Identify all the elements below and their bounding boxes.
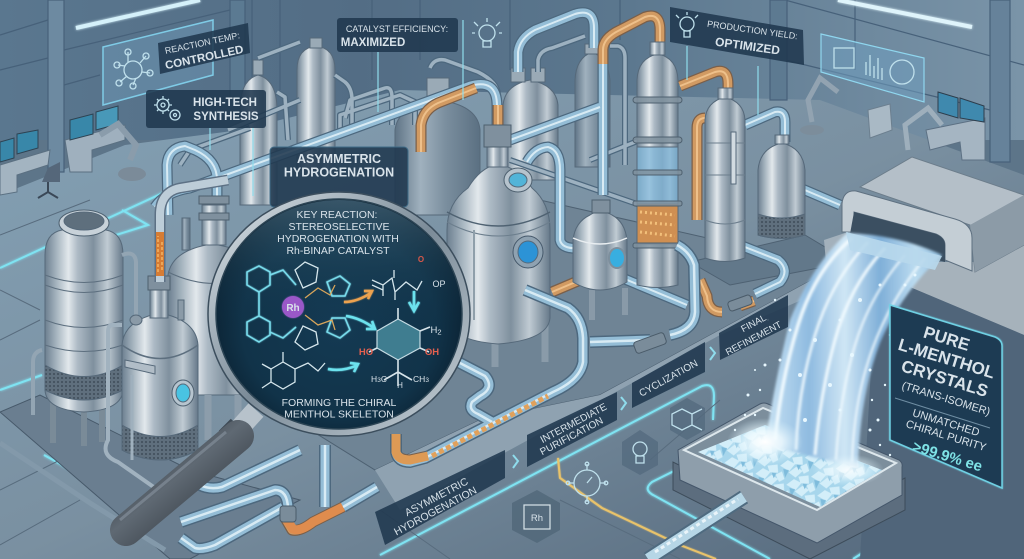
robot arm behind desk xyxy=(905,108,942,150)
lens text: key reaction: KEY REACTION: xyxy=(297,209,377,221)
label: production yield: OPTIMIZED xyxy=(714,35,781,58)
table front xyxy=(860,285,1024,559)
orange pipe top of front reactor xyxy=(158,180,228,282)
icon: bulb badge xyxy=(622,430,658,475)
arrow step 3 xyxy=(710,347,715,360)
menthol ring: H3C xyxy=(371,374,387,384)
cyan arrow down xyxy=(409,291,419,311)
process step: asymmetric hydrogenation xyxy=(375,450,505,545)
menthol ring: H xyxy=(430,325,437,336)
label: production yield xyxy=(670,7,804,65)
substrate molecule top right xyxy=(372,255,446,300)
callout line under high-tech xyxy=(210,128,253,196)
label: catalyst efficiency: CATALYST EFFICIENCY: xyxy=(346,24,448,34)
outlet pipe from tray xyxy=(648,497,744,559)
lens text: key reaction: HYDROGENATION WITH xyxy=(277,233,399,245)
menthol ring: HO xyxy=(359,347,373,358)
floor tile seams xyxy=(0,200,1024,559)
tray outer wall xyxy=(678,403,902,543)
menthol ring: H xyxy=(397,381,403,390)
column: tall reaction column xyxy=(633,42,682,288)
tray base plate xyxy=(673,462,905,559)
cyan arrow right xyxy=(346,316,375,329)
process step: cyclization xyxy=(632,342,705,408)
left consoles and chair xyxy=(0,106,146,198)
glass pipework xyxy=(155,13,840,305)
cyan arrow bottom xyxy=(328,363,358,372)
chute front frame xyxy=(842,191,972,271)
lens text: forming: MENTHOL SKELETON xyxy=(284,408,394,420)
label: catalyst efficiency: MAXIMIZED xyxy=(341,37,405,49)
orange process pipes xyxy=(285,16,754,530)
low glass pipes xyxy=(181,245,695,549)
splash glow xyxy=(727,418,803,466)
icon: chip xyxy=(834,48,854,68)
vessel: right tank xyxy=(758,135,805,238)
process step: final refinement: FINAL xyxy=(739,313,768,335)
substrate molecule top right: O xyxy=(418,255,424,264)
lens text: key reaction: STEREOSELECTIVE xyxy=(289,221,389,233)
process step: asymmetric hydrogenation: ASYMMETRIC xyxy=(403,475,471,519)
icon: gears xyxy=(154,96,180,120)
vessel: main reactor xyxy=(447,125,550,367)
chute top box xyxy=(860,157,1024,272)
icon: idea bulb xyxy=(472,18,502,47)
chute housing xyxy=(824,157,1024,272)
catalyst molecule xyxy=(247,262,350,350)
callout lines under production label xyxy=(687,46,758,115)
label: high-tech synthesis: SYNTHESIS xyxy=(193,111,259,123)
vessel: large storage tank xyxy=(33,210,136,446)
vessel: small side reactor xyxy=(573,200,627,320)
menthol ring: 2 xyxy=(437,328,442,336)
lens text: key reaction: Rh-BINAP CATALYST xyxy=(286,245,390,257)
process step: final refinement: REFINEMENT xyxy=(724,319,784,358)
chute opening xyxy=(850,212,945,262)
hologram screen right xyxy=(821,34,924,102)
label: high-tech synthesis: HIGH-TECH xyxy=(193,97,257,109)
tray inner wall xyxy=(684,408,896,510)
process step: cyclization: CYCLIZATION xyxy=(638,358,700,399)
callout: pure L-menthol crystals: CHIRAL PURITY xyxy=(904,418,988,454)
process stream inside pipe xyxy=(432,396,548,456)
robot arm right wall xyxy=(800,78,838,135)
equipment platform left xyxy=(0,395,300,559)
magnifier handle xyxy=(120,410,256,530)
terpene molecule bottom xyxy=(262,352,325,389)
tray xyxy=(673,403,905,559)
crystals xyxy=(698,425,882,507)
crystal waterfall xyxy=(727,232,942,486)
Rh atom xyxy=(282,296,304,318)
callout: pure L-menthol crystals xyxy=(890,305,1002,488)
lens text: forming: FORMING THE CHIRAL xyxy=(282,397,397,409)
arrow step 1 xyxy=(513,455,518,468)
vessel: small front reactor xyxy=(106,276,198,495)
platform front steps xyxy=(375,262,860,510)
orange arrow xyxy=(344,291,372,302)
floor pipe left xyxy=(0,443,165,550)
control desk with monitors xyxy=(926,92,985,160)
callout: pure L-menthol crystals: (TRANS-ISOMER) xyxy=(900,380,991,418)
menthol ring: CH3 xyxy=(413,374,429,384)
catalyst molecule: Rh xyxy=(286,303,300,314)
valve xyxy=(280,294,753,522)
chute side face xyxy=(970,195,1024,272)
ceiling light right xyxy=(838,0,972,27)
ceiling light left xyxy=(76,0,200,28)
equipment platform center xyxy=(230,200,845,470)
glowing floor lines xyxy=(0,192,935,559)
process step: intermediate purification: INTERMEDIATE xyxy=(539,401,609,446)
vessel: medium reactor behind lens xyxy=(168,196,262,440)
icon: bulb xyxy=(676,12,698,37)
wall panels and columns xyxy=(0,0,1024,172)
icon: molecule network xyxy=(114,49,153,89)
icon: molecule badge xyxy=(670,398,705,440)
label: reaction temp xyxy=(158,23,250,74)
callout line under catalyst label xyxy=(378,20,463,112)
icon: bar spectrum xyxy=(866,55,882,80)
hologram screen left xyxy=(103,20,213,105)
column: secondary column xyxy=(705,88,745,262)
callout: pure L-menthol crystals: >99.9% ee xyxy=(910,438,984,475)
wall background xyxy=(0,0,1024,140)
background tanks xyxy=(240,38,610,215)
orange end of lower left pipe xyxy=(287,434,428,530)
crystal spray xyxy=(734,274,916,456)
heading panel: asymmetric hydrogenation xyxy=(270,147,408,207)
process step: intermediate purification xyxy=(527,392,617,467)
menthol ring xyxy=(359,308,442,390)
substrate molecule top right: OP xyxy=(432,279,446,289)
label: high-tech synthesis xyxy=(146,90,266,128)
cabinet right xyxy=(868,104,892,138)
callout: pure L-menthol crystals: PURE xyxy=(921,323,972,355)
heading panel: asymmetric hydrogenation: ASYMMETRIC xyxy=(297,152,381,166)
process step: final refinement xyxy=(719,295,788,360)
callout: pure L-menthol crystals: UNMATCHED xyxy=(911,407,981,439)
label: reaction temp: REACTION TEMP: xyxy=(164,30,241,56)
label: reaction temp: CONTROLLED xyxy=(164,44,245,72)
magnifying lens xyxy=(208,192,470,436)
lens text: forming xyxy=(282,397,397,420)
process step: asymmetric hydrogenation: HYDROGENATION xyxy=(392,484,479,538)
menthol ring: OH xyxy=(425,347,439,358)
arrow step 2 xyxy=(621,397,626,410)
lens text: key reaction xyxy=(277,209,399,257)
icon: gauge molecule xyxy=(566,462,608,504)
background pipework xyxy=(180,36,640,205)
icon: Rh chip badge xyxy=(512,490,560,543)
process step: intermediate purification: PURIFICATION xyxy=(538,416,605,458)
column base slab xyxy=(690,235,850,285)
heading panel: asymmetric hydrogenation: HYDROGENATION xyxy=(284,166,394,180)
label: production yield: PRODUCTION YIELD: xyxy=(706,19,798,41)
table surface right xyxy=(895,245,1024,335)
chute lip xyxy=(824,232,850,262)
label: catalyst efficiency xyxy=(337,18,458,52)
icon: molecule cluster xyxy=(890,60,914,84)
callout: pure L-menthol crystals: L-MENTHOL xyxy=(896,335,997,382)
icon: Rh chip badge: Rh xyxy=(531,513,543,524)
callout: pure L-menthol crystals: CRYSTALS xyxy=(899,357,990,401)
